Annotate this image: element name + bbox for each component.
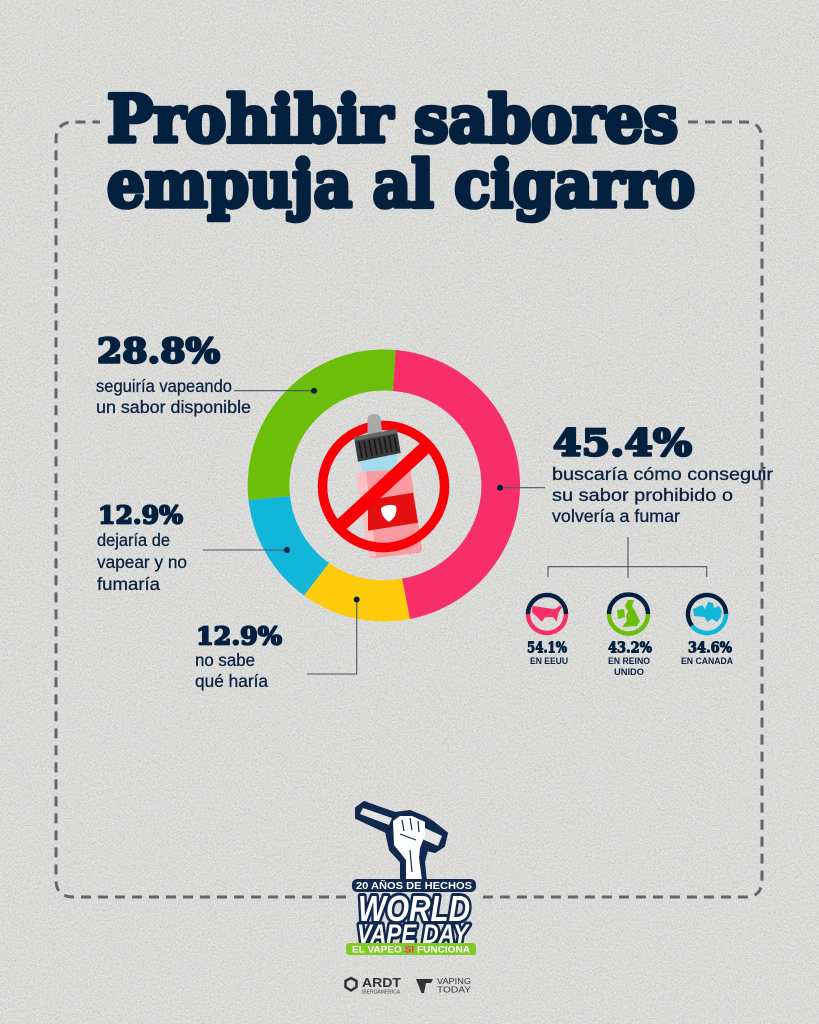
donut chart: [248, 349, 520, 622]
logo: Vaping Today: VAPING: [437, 976, 471, 986]
logo: ARDT Iberoamerica: ARDT: [362, 976, 401, 990]
callout: 12.9% dejaría de vapear: [97, 500, 290, 594]
segment: green 28.8%: [248, 349, 396, 500]
callout: 28.8%: 28.8%: [97, 332, 220, 372]
callout: 12.9% dejaría de vapear: fumaría: [97, 574, 160, 594]
VAPE DAY: VAPE DAY: [357, 919, 470, 949]
dashed frame: [56, 122, 762, 897]
callout: 45.4%: 45.4%: [553, 422, 692, 464]
logo: ARDT Iberoamerica: IBEROAMERICA: [362, 990, 401, 996]
WORLD: WORLD: [358, 888, 470, 929]
callout: 12.9% no sabe: qué haría: [195, 671, 268, 691]
ring gauge: [528, 595, 566, 614]
icon: prohibited flavored vape bottle: [322, 414, 444, 558]
segment: blue 12.9%: [248, 496, 329, 596]
country stat: Reino Unido: UNIDO: [614, 667, 644, 678]
title: [107, 82, 695, 222]
country stat: Reino Unido: [608, 594, 652, 678]
strawberry: [381, 505, 396, 522]
logo: Vaping Today: TODAY: [437, 984, 471, 994]
callout: 12.9% dejaría de vapear: 12.9%: [98, 500, 183, 530]
title: empuja al cigarro: [107, 146, 695, 222]
country stat: EEUU: EN EEUU: [530, 656, 568, 667]
callout: 12.9% dejaría de vapear: dejaría de: [97, 530, 170, 550]
country stat: EEUU: [527, 595, 568, 667]
prohibition sign: [322, 426, 444, 548]
ring gauge: [609, 594, 648, 614]
bottle dropper: [368, 414, 382, 435]
callout: 12.9% dejaría de vapear: vapear y no: [97, 552, 187, 572]
bottle cap: [354, 429, 401, 462]
connector: country bracket: [548, 537, 707, 578]
title: Prohibir sabores: [107, 82, 678, 158]
segment: yellow 12.9%: [304, 563, 410, 622]
fist emblem: [356, 802, 447, 882]
segment: pink 45.4%: [393, 350, 520, 619]
bottle body: [357, 469, 422, 558]
ring gauge: [688, 595, 726, 626]
callout: 45.4%: [497, 422, 773, 526]
country stat: Canada: [681, 595, 733, 667]
bottle neck: [360, 452, 397, 474]
tagline: 20 años: 20 AÑOS DE HECHOS: [356, 879, 472, 892]
country stat: Reino Unido: EN REINO: [608, 656, 650, 667]
logo: ARDT Iberoamerica: [346, 976, 401, 996]
callout: 12.9% no sabe: 12.9%: [196, 622, 282, 650]
callout: 45.4%: volvería a fumar: [552, 506, 680, 526]
callout: 45.4%: buscaría cómo conseguir: [552, 464, 773, 484]
icon: UK map: [617, 600, 640, 627]
callout: 28.8%: un sabor disponible: [96, 397, 251, 417]
country stat: EEUU: 54.1%: [527, 640, 567, 656]
logo: World Vape Day: [346, 802, 476, 955]
green pill: EL VAPEO SI FUNCIONA: [352, 944, 471, 954]
callout: 12.9% no sabe: no sabe: [195, 650, 255, 670]
callout: 45.4%: su sabor prohibido o: [552, 485, 733, 505]
icon: USA map: [532, 606, 562, 622]
callout: 28.8%: seguiría vapeando: [96, 376, 232, 396]
country stat: Canada: EN CANADA: [681, 656, 733, 667]
bottle label: [368, 493, 418, 531]
callout: 12.9% no sabe: [195, 596, 360, 691]
icon: Canada map: [693, 602, 722, 622]
logo: Vaping Today: [416, 976, 471, 994]
country stat: Reino Unido: 43.2%: [608, 640, 652, 656]
callout: 28.8%: [96, 332, 317, 417]
country stat: Canada: 34.6%: [688, 640, 732, 656]
